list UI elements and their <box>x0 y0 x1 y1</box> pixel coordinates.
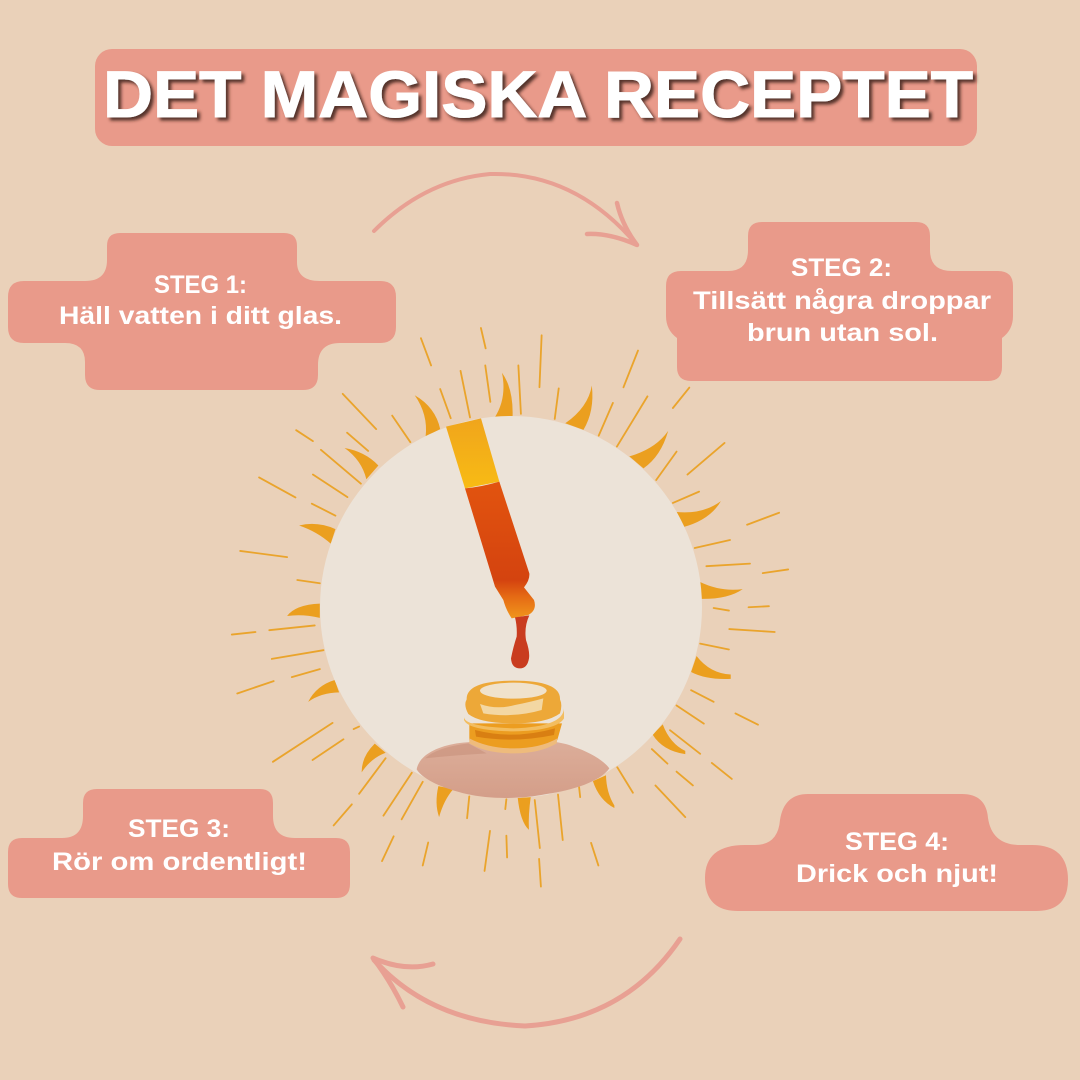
title: DET MAGISKA RECEPTET <box>103 57 973 131</box>
icon: clay base <box>417 740 609 798</box>
panel: step 4 <box>705 794 1068 911</box>
step 1 text: Häll vatten i ditt glas. <box>59 302 342 330</box>
step 1 text <box>59 271 342 330</box>
step 2 text: brun utan sol. <box>747 319 938 347</box>
sunburst rays <box>232 328 788 887</box>
panel: step 3 <box>8 789 350 898</box>
icon: dropper <box>446 418 535 618</box>
step 4 text: Drick och njut! <box>796 860 998 888</box>
panel: step 2 <box>666 222 1013 381</box>
arrow: step 1 to step 2 <box>374 174 637 245</box>
sun crescents <box>287 373 743 830</box>
sun disc <box>320 416 702 798</box>
panel: step 1 <box>8 233 396 390</box>
step 3 text: STEG 3: <box>128 815 230 843</box>
step 2 text: Tillsätt några droppar <box>693 287 991 315</box>
icon: drop <box>511 615 529 668</box>
illustration: dropper and jar <box>417 418 609 798</box>
step 2 text: STEG 2: <box>791 254 892 282</box>
step 4 text: STEG 4: <box>845 828 949 856</box>
step 2 text <box>693 254 991 347</box>
step 3 text <box>52 815 307 876</box>
step 3 text: Rör om ordentligt! <box>52 848 307 876</box>
jar shadow on clay <box>425 743 487 758</box>
title banner <box>95 49 977 146</box>
step 4 text <box>796 828 998 888</box>
step 1 text: STEG 1: <box>154 271 247 299</box>
icon: jar <box>464 681 564 753</box>
arrow: step 4 to step 3 <box>373 939 680 1026</box>
